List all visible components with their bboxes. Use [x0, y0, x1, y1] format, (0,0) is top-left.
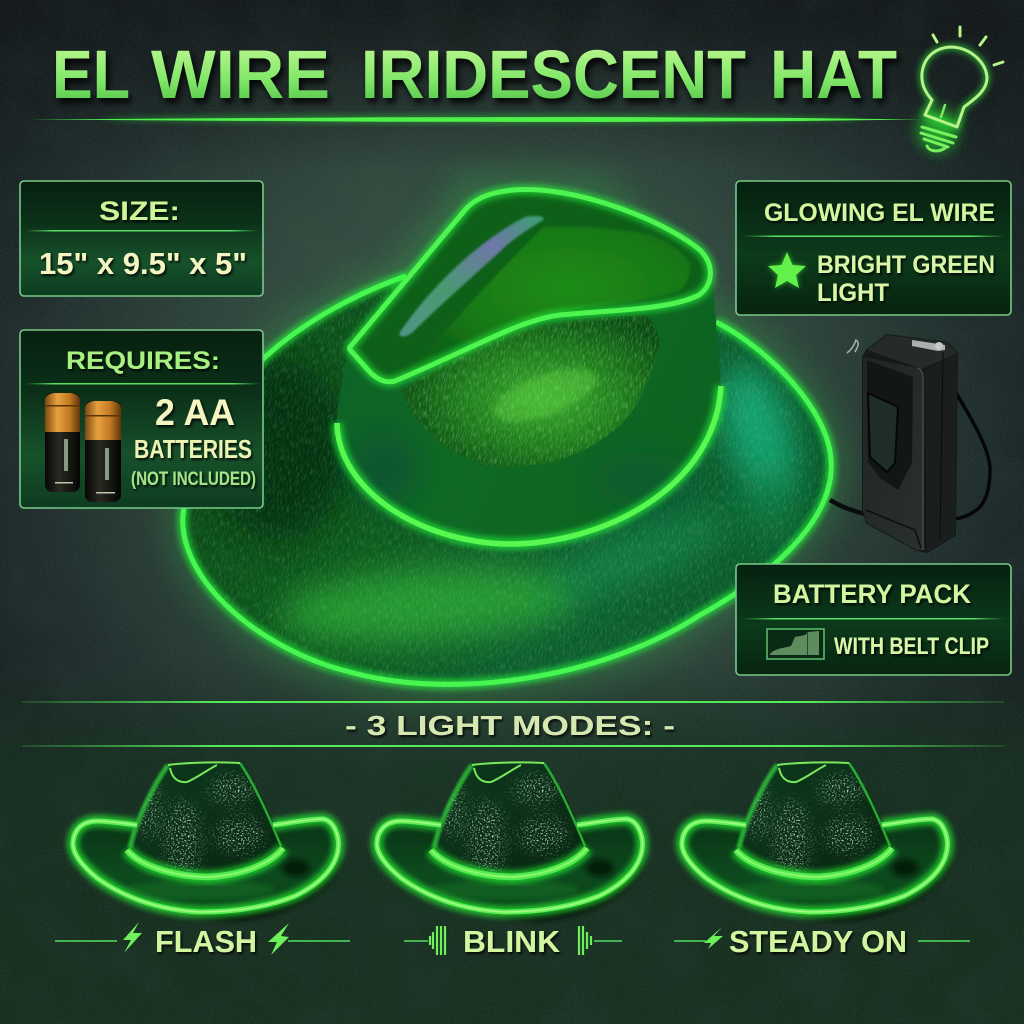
panel: size	[20, 181, 263, 296]
main hat	[158, 166, 856, 710]
requires heading: REQUIRES:	[66, 347, 220, 375]
panel: glowing el wire	[736, 181, 1011, 315]
title: HAT	[770, 36, 897, 113]
mode 3: steady on hat	[682, 760, 949, 920]
crown bowl	[420, 226, 690, 362]
mode label: steady on	[674, 924, 970, 959]
icon: belt clip	[767, 629, 824, 659]
section heading: light modes: - 3 LIGHT MODES: -	[345, 710, 675, 741]
title: WIRE	[151, 36, 330, 113]
mode 1: flash hat	[73, 760, 340, 920]
battery pack heading: BATTERY PACK	[773, 579, 971, 609]
title: IRIDESCENT	[361, 36, 746, 113]
belt clip label: WITH BELT CLIP	[834, 633, 989, 660]
bright green text: BRIGHT GREEN	[817, 251, 995, 279]
hat glow	[183, 190, 831, 684]
bright green text: LIGHT	[817, 279, 889, 307]
icon: light bulb	[918, 27, 1003, 152]
mode label: blink	[404, 924, 622, 959]
mode 2: blink hat	[377, 760, 644, 920]
hat brim	[174, 268, 840, 694]
panel: requires	[20, 330, 263, 508]
cable	[830, 500, 865, 514]
not included note: (NOT INCLUDED)	[131, 469, 256, 490]
iridescent reflection	[399, 216, 544, 336]
title: EL	[52, 36, 130, 113]
crown outline	[350, 190, 710, 382]
icon: star	[768, 252, 806, 288]
size value: 15" x 9.5" x 5"	[39, 246, 247, 281]
el wire heading: GLOWING EL WIRE	[764, 199, 995, 227]
size heading: SIZE:	[99, 196, 180, 226]
hat crown	[337, 190, 721, 544]
panel: battery pack	[736, 564, 1011, 675]
mode label: steady on: STEADY ON	[729, 924, 907, 959]
batteries label: BATTERIES	[134, 434, 252, 464]
mode label: blink: BLINK	[463, 924, 561, 959]
title	[52, 36, 897, 113]
battery pack	[830, 335, 990, 552]
battery count: 2 AA	[155, 392, 235, 433]
icon: batteries	[45, 393, 121, 502]
mode label: flash	[55, 922, 350, 959]
mode label: flash: FLASH	[155, 924, 257, 959]
hat band	[337, 386, 721, 544]
